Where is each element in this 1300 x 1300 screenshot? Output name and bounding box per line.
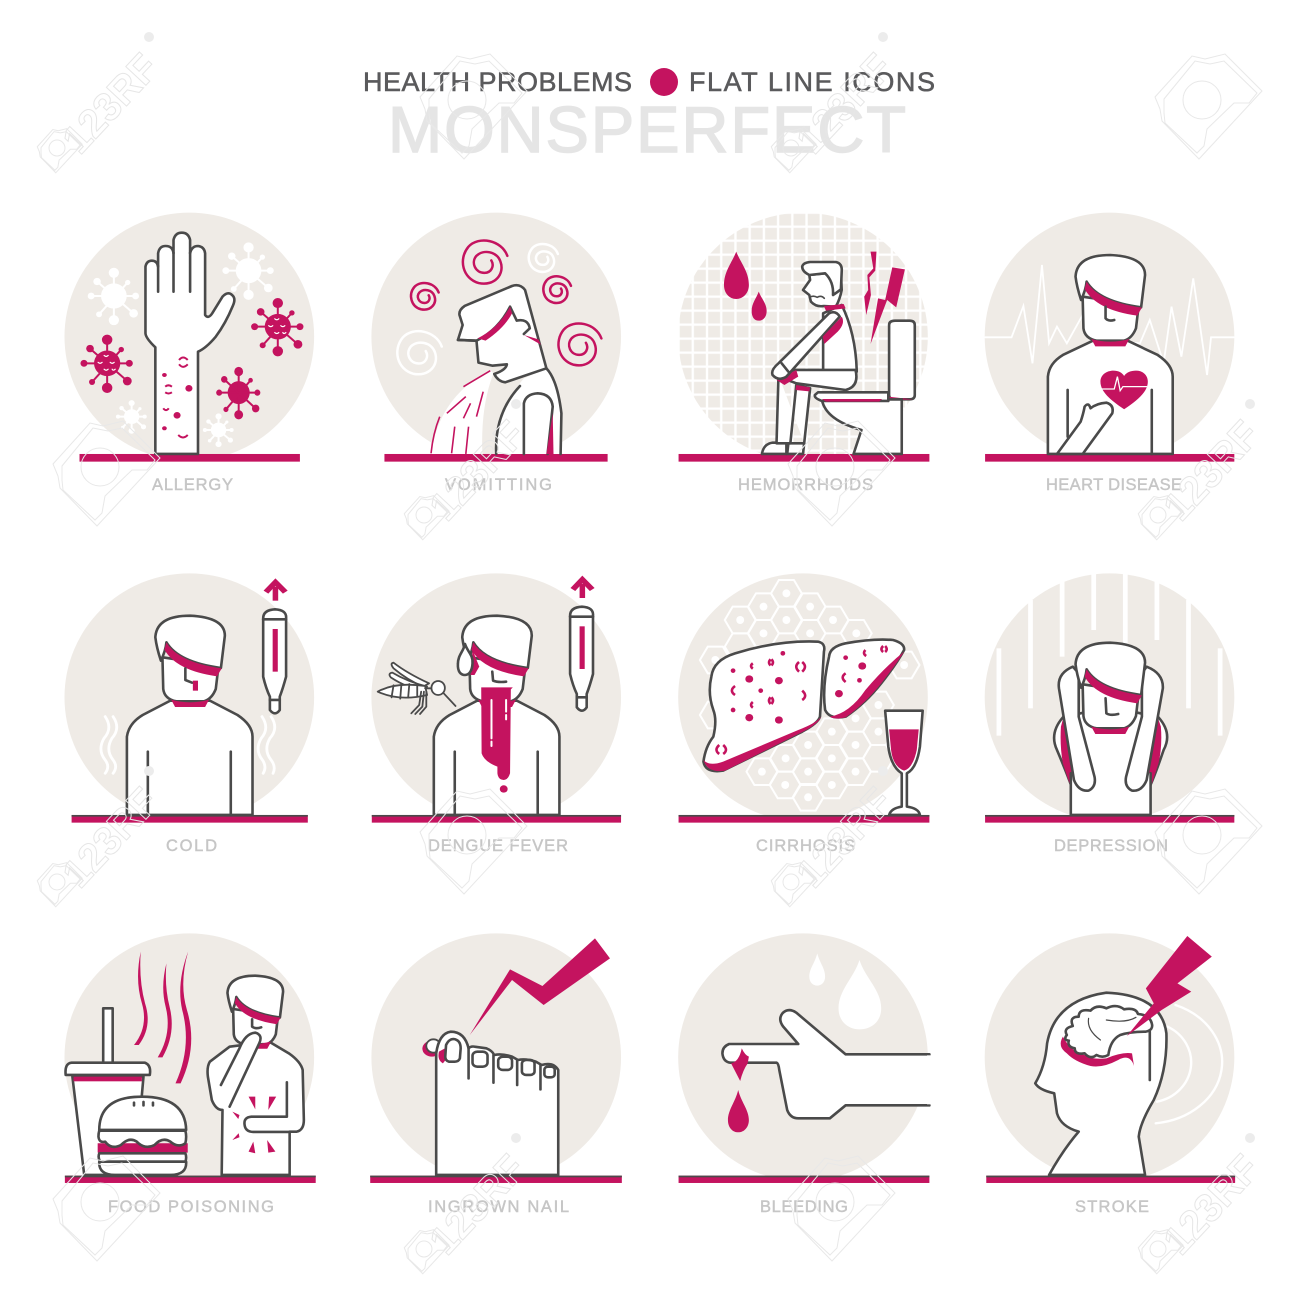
- heart disease icon: [985, 213, 1234, 462]
- bleeding icon: [678, 933, 930, 1183]
- title dot: [650, 68, 678, 96]
- panel: vomitting: [371, 213, 621, 494]
- title: flat line icons: FLAT LINE ICONS: [689, 67, 935, 97]
- panel: cold: [64, 573, 314, 855]
- label: cold: COLD: [166, 837, 217, 855]
- dengue fever icon: [371, 573, 621, 823]
- label: heart disease: HEART DISEASE: [1046, 476, 1182, 494]
- title: health problems: HEALTH PROBLEMS: [363, 67, 632, 97]
- cirrhosis icon: [678, 573, 929, 823]
- label: depression: DEPRESSION: [1054, 837, 1168, 855]
- cold icon: [64, 573, 314, 823]
- panel: stroke: [985, 933, 1235, 1216]
- brand name: MONSPERFECT: [388, 93, 906, 166]
- hemorrhoids icon: [678, 213, 929, 462]
- vomitting icon: [371, 213, 621, 462]
- stroke icon: [985, 933, 1235, 1183]
- panel: cirrhosis: [678, 573, 929, 855]
- ingrown nail icon: [370, 933, 622, 1183]
- label: allergy: ALLERGY: [152, 476, 233, 494]
- food poisoning icon: [64, 933, 316, 1183]
- label: stroke: STROKE: [1075, 1198, 1149, 1216]
- label: ingrown nail: INGROWN NAIL: [428, 1198, 569, 1216]
- label: dengue fever: DENGUE FEVER: [428, 837, 568, 855]
- panel: bleeding: [678, 933, 930, 1216]
- panel: hemorrhoids: [678, 213, 929, 494]
- panel: dengue fever: [371, 573, 621, 855]
- label: bleeding: BLEEDING: [760, 1198, 848, 1216]
- label: cirrhosis: CIRRHOSIS: [756, 837, 855, 855]
- icon: mosquito: [378, 663, 456, 714]
- panel: ingrown nail: [370, 933, 622, 1216]
- label: vomitting: VOMITTING: [445, 476, 552, 494]
- panel: depression: [985, 572, 1234, 855]
- panel: heart disease: [985, 213, 1234, 494]
- panel: allergy: [64, 213, 314, 494]
- allergy icon: [64, 213, 314, 462]
- panel: food poisoning: [64, 933, 316, 1216]
- depression icon: [985, 572, 1234, 823]
- label: food poisoning: FOOD POISONING: [108, 1198, 274, 1216]
- label: hemorrhoids: HEMORRHOIDS: [738, 476, 873, 494]
